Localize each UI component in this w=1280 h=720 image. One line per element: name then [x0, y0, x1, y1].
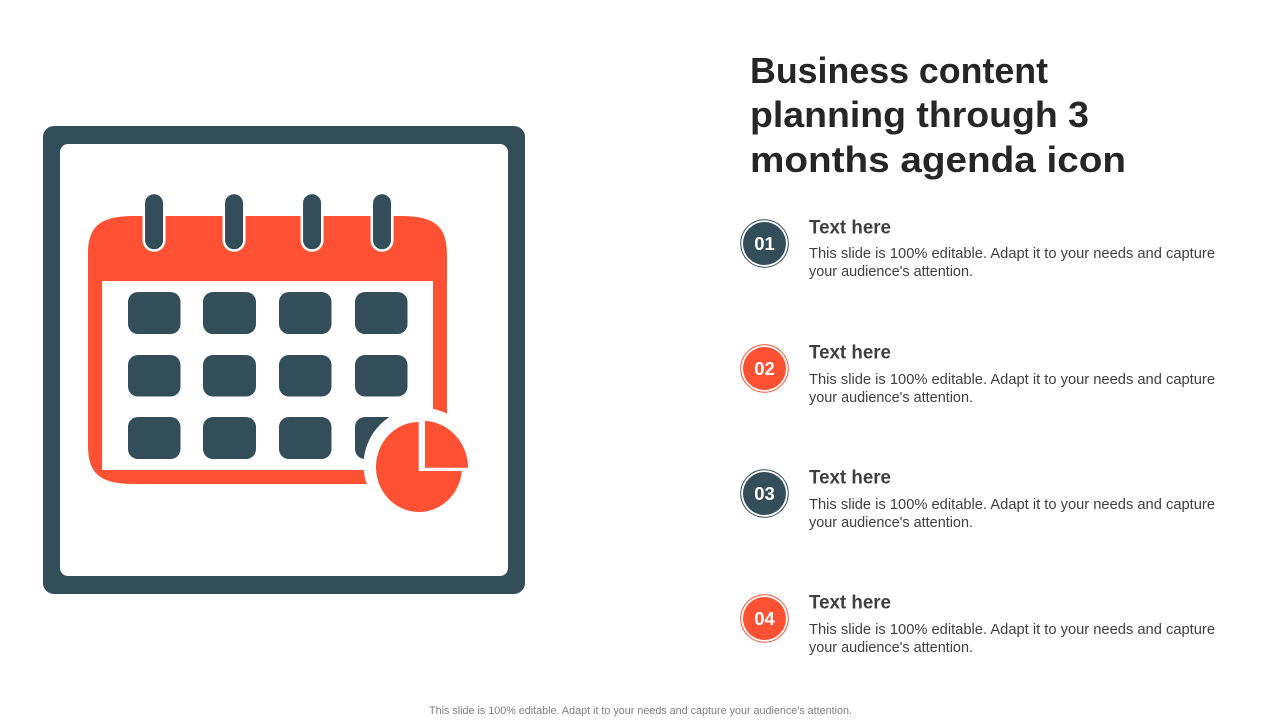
icon: calendar in frame	[43, 126, 525, 594]
item description: your audience's attention.	[809, 264, 973, 280]
item description: This slide is 100% editable. Adapt it to your needs and capture	[809, 497, 1215, 513]
icon frame	[43, 126, 525, 594]
item description	[809, 497, 1215, 531]
number badge 02	[741, 345, 788, 392]
title: Business content	[750, 50, 1048, 91]
item description	[809, 622, 1215, 656]
number badge 03: 03	[754, 483, 775, 504]
number badge 01: 01	[754, 233, 775, 254]
calendar body	[88, 216, 447, 484]
item heading: Text here	[809, 342, 891, 364]
item description: your audience's attention.	[809, 515, 973, 531]
item description: your audience's attention.	[809, 640, 973, 656]
item heading: Text here	[809, 468, 891, 488]
item description	[809, 246, 1215, 280]
item description: This slide is 100% editable. Adapt it to your needs and capture	[809, 372, 1215, 388]
number badge 01	[741, 220, 788, 267]
item description: This slide is 100% editable. Adapt it to your needs and capture	[809, 246, 1215, 262]
calendar day cells	[128, 292, 408, 459]
number badge 02: 02	[754, 358, 775, 379]
footer note: This slide is 100% editable. Adapt it to your needs and capture your audience's attention.	[429, 705, 852, 717]
agenda item 02	[741, 342, 1215, 406]
calendar rings	[144, 193, 392, 250]
title	[750, 50, 1126, 180]
item heading: Text here	[809, 592, 891, 614]
item description: your audience's attention.	[809, 390, 973, 406]
agenda item 04	[741, 592, 1215, 656]
pie chart badge	[364, 408, 478, 522]
agenda item 03	[741, 468, 1215, 531]
title: planning through 3	[750, 94, 1089, 135]
title: months agenda icon	[750, 139, 1126, 180]
item description	[809, 372, 1215, 406]
number badge 03	[741, 470, 788, 517]
item description: This slide is 100% editable. Adapt it to your needs and capture	[809, 622, 1215, 638]
agenda item 01	[741, 218, 1215, 280]
number badge 04	[741, 595, 788, 642]
item heading: Text here	[809, 218, 891, 238]
number badge 04: 04	[754, 608, 775, 629]
